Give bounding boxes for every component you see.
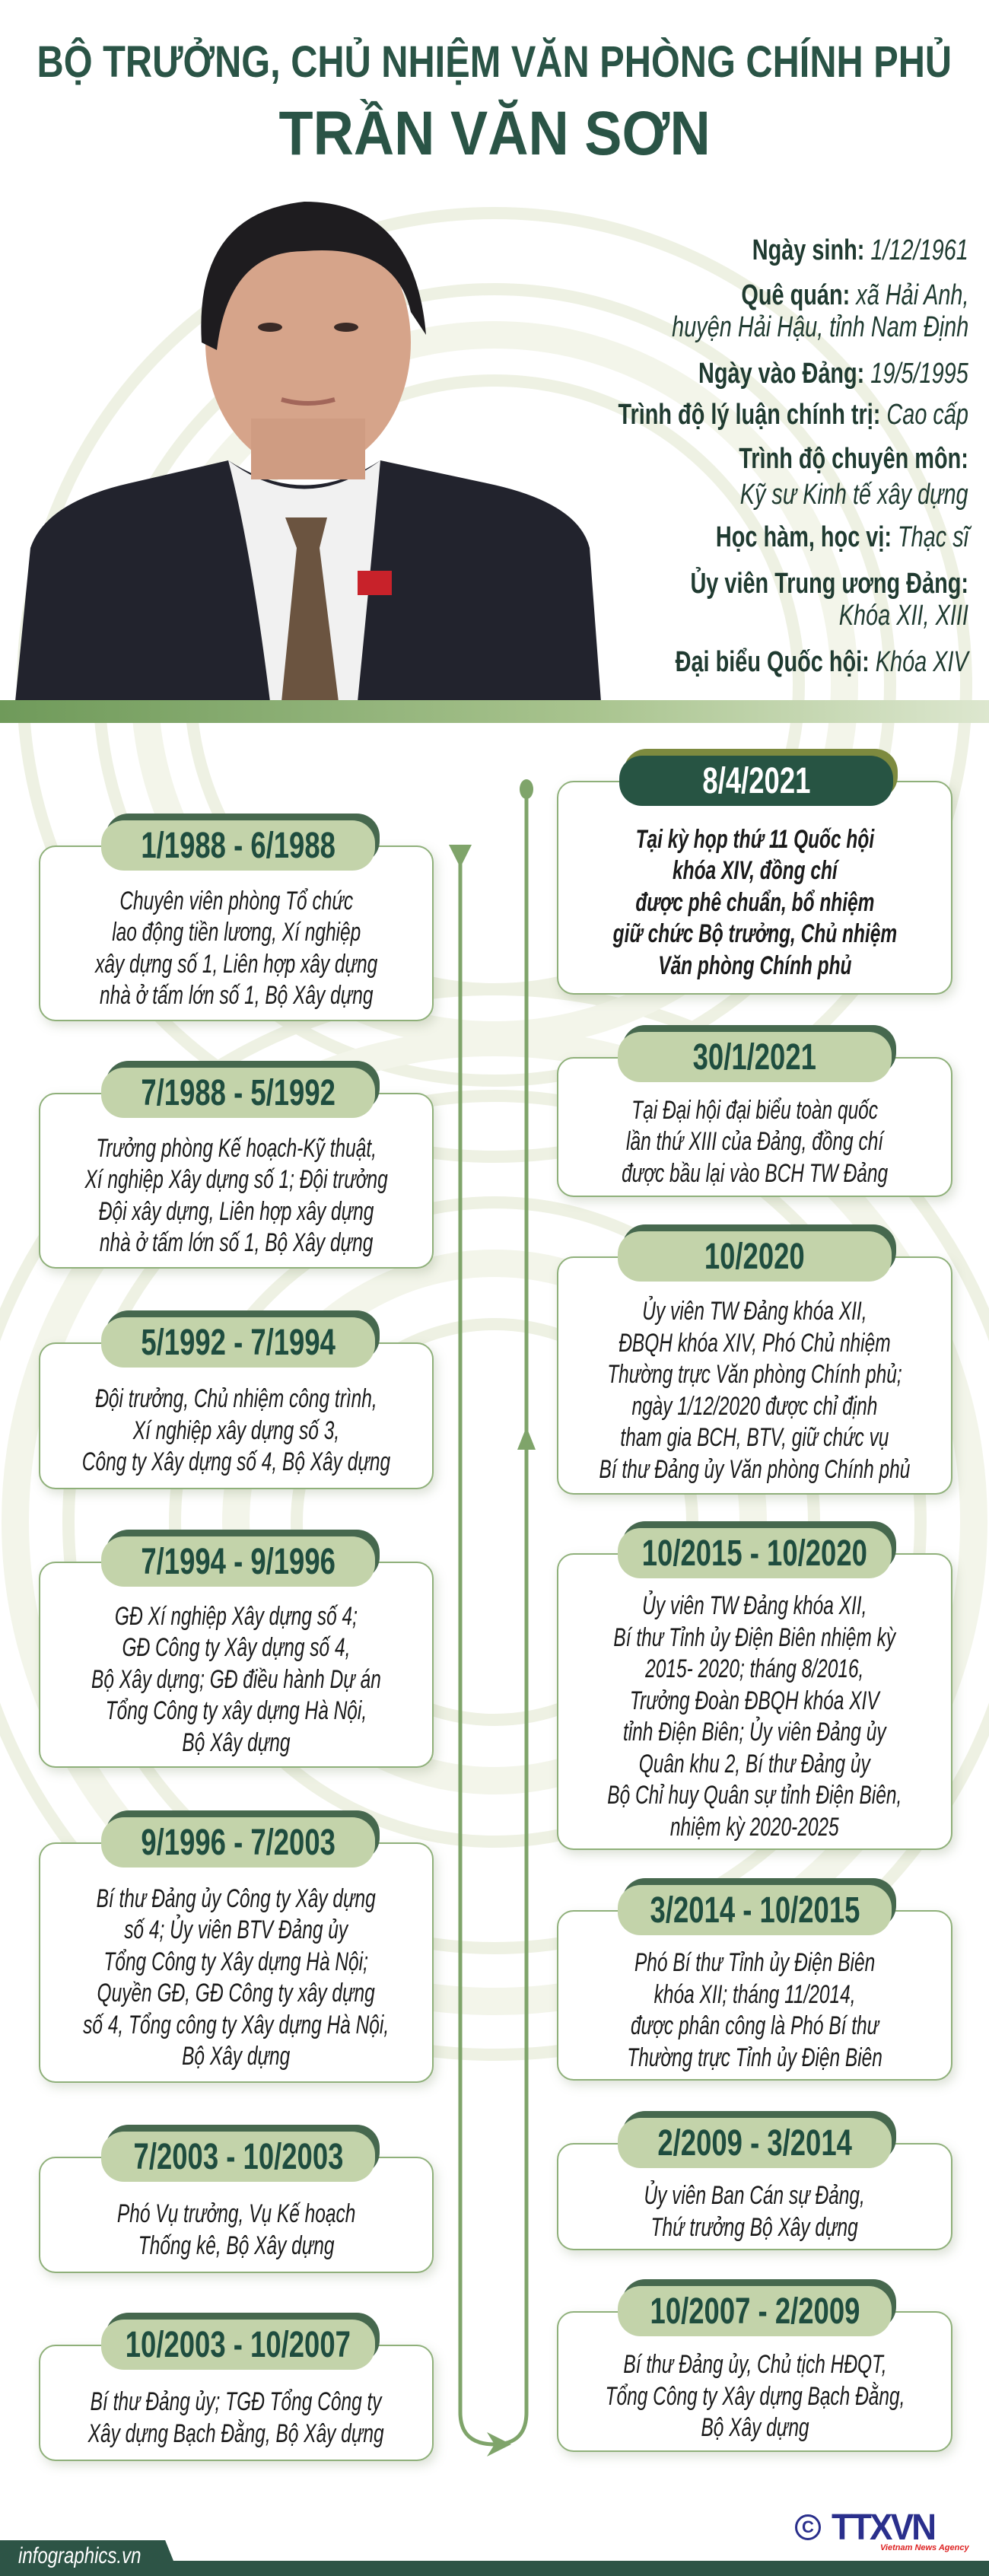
- text: Ủy viên TW Đảng khóa XII,: [642, 1591, 867, 1620]
- text: Bộ Xây dựng: [182, 1728, 291, 1757]
- pill: 10/2007 - 2/2009: [618, 2286, 892, 2336]
- text: Tổng Công ty Xây dựng Hà Nội;: [104, 1947, 368, 1976]
- info block: Trình độ chuyên môn:: [739, 443, 968, 475]
- text: Đội xây dựng, Liên hợp xây dựng: [99, 1196, 374, 1225]
- text: GĐ Công ty Xây dựng số 4,: [122, 1633, 350, 1662]
- timeline lines: [449, 779, 536, 2457]
- green band: [0, 700, 989, 723]
- info block: Học hàm, học vị: Thạc sĩ: [716, 521, 968, 553]
- pill: 10/2020: 10/2020: [704, 1236, 805, 1277]
- pill: 10/2020: [618, 1231, 892, 1282]
- text: Phó Vụ trưởng, Vụ Kế hoạch: [117, 2199, 355, 2228]
- text: Bí thư Tỉnh ủy Điện Biên nhiệm kỳ: [614, 1622, 895, 1651]
- pill: 8/4/2021: 8/4/2021: [702, 761, 810, 801]
- text: khóa XII; tháng 11/2014,: [654, 1980, 855, 2009]
- portrait photo: [15, 202, 601, 700]
- pill: 3/2014 - 10/2015: 3/2014 - 10/2015: [650, 1890, 860, 1930]
- logo: TTXVN: Vietnam News Agency: [880, 2543, 969, 2552]
- text: Bí thư Đảng ủy Văn phòng Chính phủ: [599, 1455, 910, 1484]
- left events: xây dựng số 1, Liên hợp xây dựng: [95, 950, 377, 979]
- text: Phó Bí thư Tỉnh ủy Điện Biên: [634, 1948, 875, 1977]
- pill: 7/1994 - 9/1996: 7/1994 - 9/1996: [141, 1542, 335, 1581]
- pill: 7/2003 - 10/2003: 7/2003 - 10/2003: [133, 2137, 343, 2176]
- pill: 5/1992 - 7/1994: 5/1992 - 7/1994: [141, 1323, 335, 1362]
- text: được bầu lại vào BCH TW Đảng: [622, 1159, 888, 1188]
- text: tham gia BCH, BTV, giữ chức vụ: [620, 1423, 889, 1452]
- info block: Đại biểu Quốc hội: Khóa XIV: [676, 646, 968, 678]
- pill: 2/2009 - 3/2014: 2/2009 - 3/2014: [657, 2123, 852, 2163]
- logo: TTXVN: TTXVN: [832, 2508, 934, 2548]
- text: Tại Đại hội đại biểu toàn quốc: [631, 1096, 878, 1125]
- text: số 4; Ủy viên BTV Đảng ủy: [125, 1915, 348, 1944]
- text: nhà ở tấm lớn số 1, Bộ Xây dựng: [100, 1228, 373, 1257]
- right events: khóa XIV, đồng chí: [673, 856, 837, 885]
- pill: 30/1/2021: [618, 1032, 892, 1082]
- text: ngày 1/12/2020 được chỉ định: [632, 1391, 877, 1420]
- right events: [557, 781, 952, 995]
- text: GĐ Xí nghiệp Xây dựng số 4;: [115, 1602, 358, 1631]
- text: Quân khu 2, Bí thư Đảng ủy: [639, 1749, 870, 1778]
- info block: Ngày vào Đảng: 19/5/1995: [698, 358, 968, 390]
- info block: Quê quán: xã Hải Anh,: [741, 279, 968, 311]
- text: Ủy viên Ban Cán sự Đảng,: [644, 2181, 865, 2210]
- pill: 10/2015 - 10/2020: 10/2015 - 10/2020: [642, 1533, 867, 1574]
- pill: 1/1988 - 6/1988: [101, 820, 375, 871]
- pill: 10/2003 - 10/2007: [101, 2320, 375, 2370]
- text: Trưởng Đoàn ĐBQH khóa XIV: [630, 1686, 879, 1715]
- pill: 10/2003 - 10/2007: 10/2003 - 10/2007: [126, 2324, 351, 2365]
- text: Quyền GĐ, GĐ Công ty xây dựng: [97, 1979, 375, 2008]
- text: 2015- 2020; tháng 8/2016,: [645, 1654, 864, 1683]
- left events: lao động tiền lương, Xí nghiệp: [112, 918, 361, 947]
- text: Thứ trưởng Bộ Xây dựng: [651, 2213, 858, 2242]
- pill: 10/2015 - 10/2020: [618, 1528, 892, 1578]
- text: Thống kê, Bộ Xây dựng: [138, 2231, 334, 2260]
- text: Tổng Công ty xây dựng Hà Nội,: [106, 1696, 367, 1725]
- text: Trưởng phòng Kế hoạch-Kỹ thuật,: [96, 1134, 377, 1163]
- text: Thường trực Văn phòng Chính phủ;: [607, 1360, 902, 1389]
- text: Bộ Xây dựng: [701, 2413, 809, 2442]
- pill: 7/1988 - 5/1992: [101, 1068, 375, 1118]
- text: tỉnh Điện Biên; Ủy viên Đảng ủy: [623, 1718, 886, 1747]
- text: Xí nghiệp xây dựng số 3,: [133, 1416, 339, 1445]
- logo: TTXVN: C: [802, 2517, 814, 2536]
- text: ĐBQH khóa XIV, Phó Chủ nhiệm: [619, 1329, 891, 1358]
- info block: Khóa XII, XIII: [839, 600, 968, 632]
- text: Bí thư Đảng ủy; TGĐ Tổng Công ty: [91, 2387, 382, 2416]
- text: Ủy viên TW Đảng khóa XII,: [642, 1297, 867, 1326]
- pill: 3/2014 - 10/2015: [618, 1885, 892, 1935]
- text: Bí thư Đảng ủy, Chủ tịch HĐQT,: [623, 2350, 886, 2379]
- left events: [39, 845, 434, 1021]
- pill: 8/4/2021: [619, 756, 893, 806]
- info block: Ngày sinh: 1/12/1961: [752, 234, 968, 266]
- logo: TTXVN: [795, 2508, 969, 2552]
- right events: được phê chuẩn, bổ nhiệm: [635, 888, 874, 917]
- text: Bí thư Đảng ủy Công ty Xây dựng: [97, 1884, 376, 1913]
- info block: Ủy viên Trung ương Đảng:: [690, 568, 968, 600]
- left events: Chuyên viên phòng Tổ chức: [119, 886, 353, 915]
- pill: 2/2009 - 3/2014: [618, 2118, 892, 2168]
- name: TRẦN VĂN SƠN: [278, 99, 711, 168]
- pill: 7/1994 - 9/1996: [101, 1536, 375, 1587]
- text: Thường trực Tỉnh ủy Điện Biên: [627, 2043, 882, 2071]
- info block: [618, 234, 972, 678]
- text: Xây dựng Bạch Đằng, Bộ Xây dựng: [88, 2418, 384, 2447]
- title: BỘ TRƯỞNG, CHỦ NHIỆM VĂN PHÒNG CHÍNH PHỦ: [37, 37, 952, 87]
- pill: 30/1/2021: 30/1/2021: [693, 1036, 816, 1078]
- info block: huyện Hải Hậu, tỉnh Nam Định: [672, 311, 968, 343]
- text: nhiệm kỳ 2020-2025: [670, 1813, 839, 1842]
- text: số 4, Tổng công ty Xây dựng Hà Nội,: [84, 2011, 389, 2039]
- footer tab: infographics.vn: infographics.vn: [18, 2543, 141, 2568]
- footer: [0, 2561, 989, 2576]
- pill: 9/1996 - 7/2003: [101, 1817, 375, 1868]
- info block: Kỹ sư Kinh tế xây dựng: [740, 479, 968, 511]
- text: Công ty Xây dựng số 4, Bộ Xây dựng: [82, 1447, 390, 1476]
- footer tab: infographics.vn: [0, 2540, 173, 2568]
- right events: Văn phòng Chính phủ: [658, 951, 851, 980]
- text: Xí nghiệp Xây dựng số 1; Đội trưởng: [84, 1165, 388, 1194]
- text: được phân công là Phó Bí thư: [631, 2011, 879, 2040]
- left events: nhà ở tấm lớn số 1, Bộ Xây dựng: [100, 981, 373, 1010]
- pill: 5/1992 - 7/1994: [101, 1317, 375, 1368]
- pill: 9/1996 - 7/2003: 9/1996 - 7/2003: [141, 1822, 335, 1863]
- text: Đội trưởng, Chủ nhiệm công trình,: [95, 1384, 377, 1413]
- text: Tổng Công ty Xây dựng Bạch Đằng,: [605, 2382, 905, 2411]
- info block: Trình độ lý luận chính trị: Cao cấp: [618, 399, 968, 431]
- pill: 10/2007 - 2/2009: 10/2007 - 2/2009: [650, 2291, 860, 2332]
- text: lần thứ XIII của Đảng, đồng chí: [626, 1127, 883, 1156]
- text: Bộ Xây dựng: [182, 2042, 291, 2071]
- right events: Tại kỳ họp thứ 11 Quốc hội: [635, 825, 874, 854]
- pill: 7/1988 - 5/1992: 7/1988 - 5/1992: [141, 1073, 335, 1113]
- text: Bộ Chỉ huy Quân sự tỉnh Điện Biên,: [608, 1781, 902, 1810]
- pill: 7/2003 - 10/2003: [101, 2132, 375, 2182]
- pill: 1/1988 - 6/1988: 1/1988 - 6/1988: [141, 825, 335, 866]
- text: Bộ Xây dựng; GĐ điều hành Dự án: [91, 1665, 381, 1694]
- right events: giữ chức Bộ trưởng, Chủ nhiệm: [612, 919, 897, 948]
